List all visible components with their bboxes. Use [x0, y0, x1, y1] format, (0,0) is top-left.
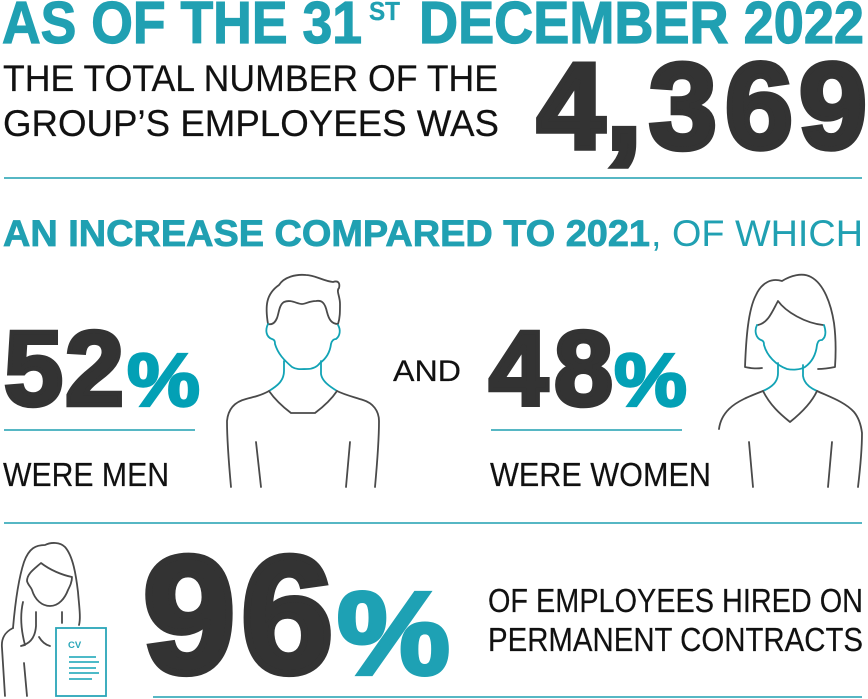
- stat: 48% women: [489, 310, 711, 493]
- stat: 52% men: [3, 310, 200, 493]
- heading: increase compared to 2021: AN INCREASE COMPARED TO 2021: [3, 213, 650, 254]
- heading: increase compared to 2021: , OF WHICH: [651, 213, 863, 254]
- icon: man: [227, 275, 379, 487]
- title: date heading: [2, 0, 864, 56]
- stat: 48% women: WERE WOMEN: [490, 456, 711, 493]
- big number: 4,369: 4: [537, 38, 605, 174]
- stat: 52% men: %: [127, 338, 200, 422]
- big number: 4,369: 369: [649, 38, 867, 174]
- stat: 52% men: WERE MEN: [3, 456, 169, 493]
- text: permanent contracts: [488, 582, 863, 658]
- text: total number of employees: THE TOTAL NUMBER OF THE: [3, 58, 498, 99]
- stat: 48% women: 48: [489, 310, 613, 428]
- stat: 96%: %: [337, 568, 450, 699]
- big number: 4,369: [537, 38, 867, 174]
- stat: 52% men: 52: [4, 310, 124, 428]
- text: and: AND: [393, 355, 461, 388]
- icon: woman: [719, 275, 862, 487]
- stat: 96%: [143, 523, 450, 699]
- icon: woman with CV: [2, 543, 106, 696]
- text: total number of employees: GROUP’S EMPLOYEES WAS: [3, 103, 499, 144]
- icon: CV document: CV: [68, 640, 82, 651]
- text: total number of employees: [3, 58, 499, 144]
- stat: 48% women: %: [614, 338, 687, 422]
- big number: 4,369: ,: [608, 44, 640, 172]
- icon: CV document: [56, 628, 106, 696]
